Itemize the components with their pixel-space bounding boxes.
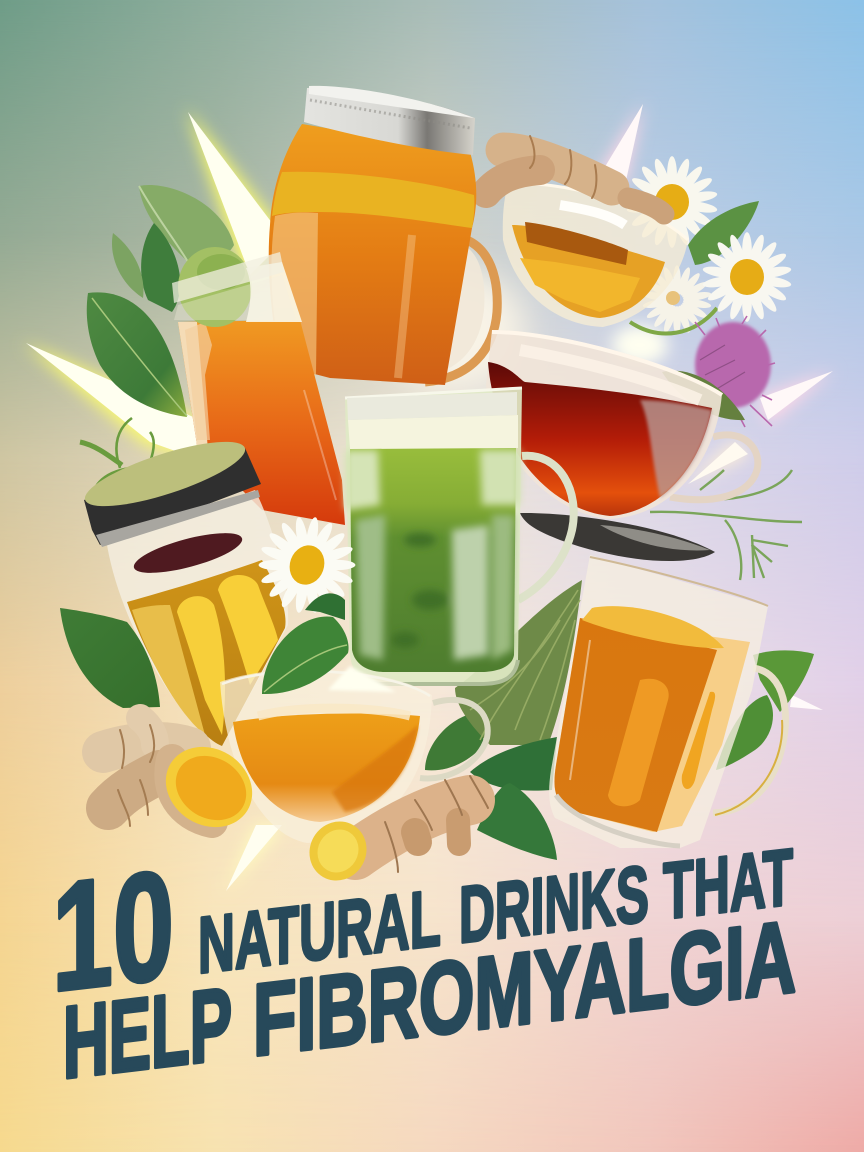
jar lid xyxy=(79,429,261,547)
tall red-orange glass jar xyxy=(172,247,345,525)
green matcha mug xyxy=(345,388,574,685)
daisy one xyxy=(626,156,718,248)
daisy three xyxy=(642,265,712,335)
glass tea cup bottom xyxy=(220,669,488,843)
herb sprig left xyxy=(80,418,168,488)
title line 2: HELP xyxy=(63,965,232,1100)
leaf inside handle xyxy=(425,712,484,770)
ginger cut face xyxy=(299,811,377,891)
title line 1: DRINKS xyxy=(459,849,649,961)
title xyxy=(52,832,796,1100)
purple thistle flower xyxy=(662,316,775,427)
ginger slice bottom centre xyxy=(299,776,488,891)
orange turmeric mug xyxy=(549,555,786,848)
title number 10: 10 xyxy=(52,837,174,1024)
jar handle xyxy=(425,237,497,382)
chamomile flower centre xyxy=(251,509,363,621)
glow between mug and cup xyxy=(328,666,396,692)
large turmeric jar xyxy=(269,86,497,385)
herb sprig right xyxy=(650,470,802,580)
daisy two xyxy=(702,232,792,322)
dark lidded honey jar xyxy=(79,429,288,746)
leaf centre xyxy=(262,593,349,694)
lower centre leaves xyxy=(470,737,557,860)
chamomile flowers right xyxy=(626,156,792,335)
leaves behind left jar xyxy=(87,185,234,417)
leaf left bottom xyxy=(60,608,160,708)
jar lid xyxy=(304,86,475,155)
title line 1: NATURAL xyxy=(198,873,441,991)
ginger and lemon bottom left xyxy=(103,718,267,843)
title line 1 xyxy=(198,832,793,991)
herb bush center xyxy=(455,580,582,745)
lemon slice xyxy=(151,731,267,843)
large red tea cup with saucer xyxy=(486,330,758,561)
ginger root top xyxy=(486,136,664,214)
glass tea bowl top right xyxy=(503,184,688,327)
title line 2 xyxy=(63,898,796,1100)
light rays xyxy=(22,102,835,893)
right leaves behind orange mug xyxy=(716,650,814,770)
